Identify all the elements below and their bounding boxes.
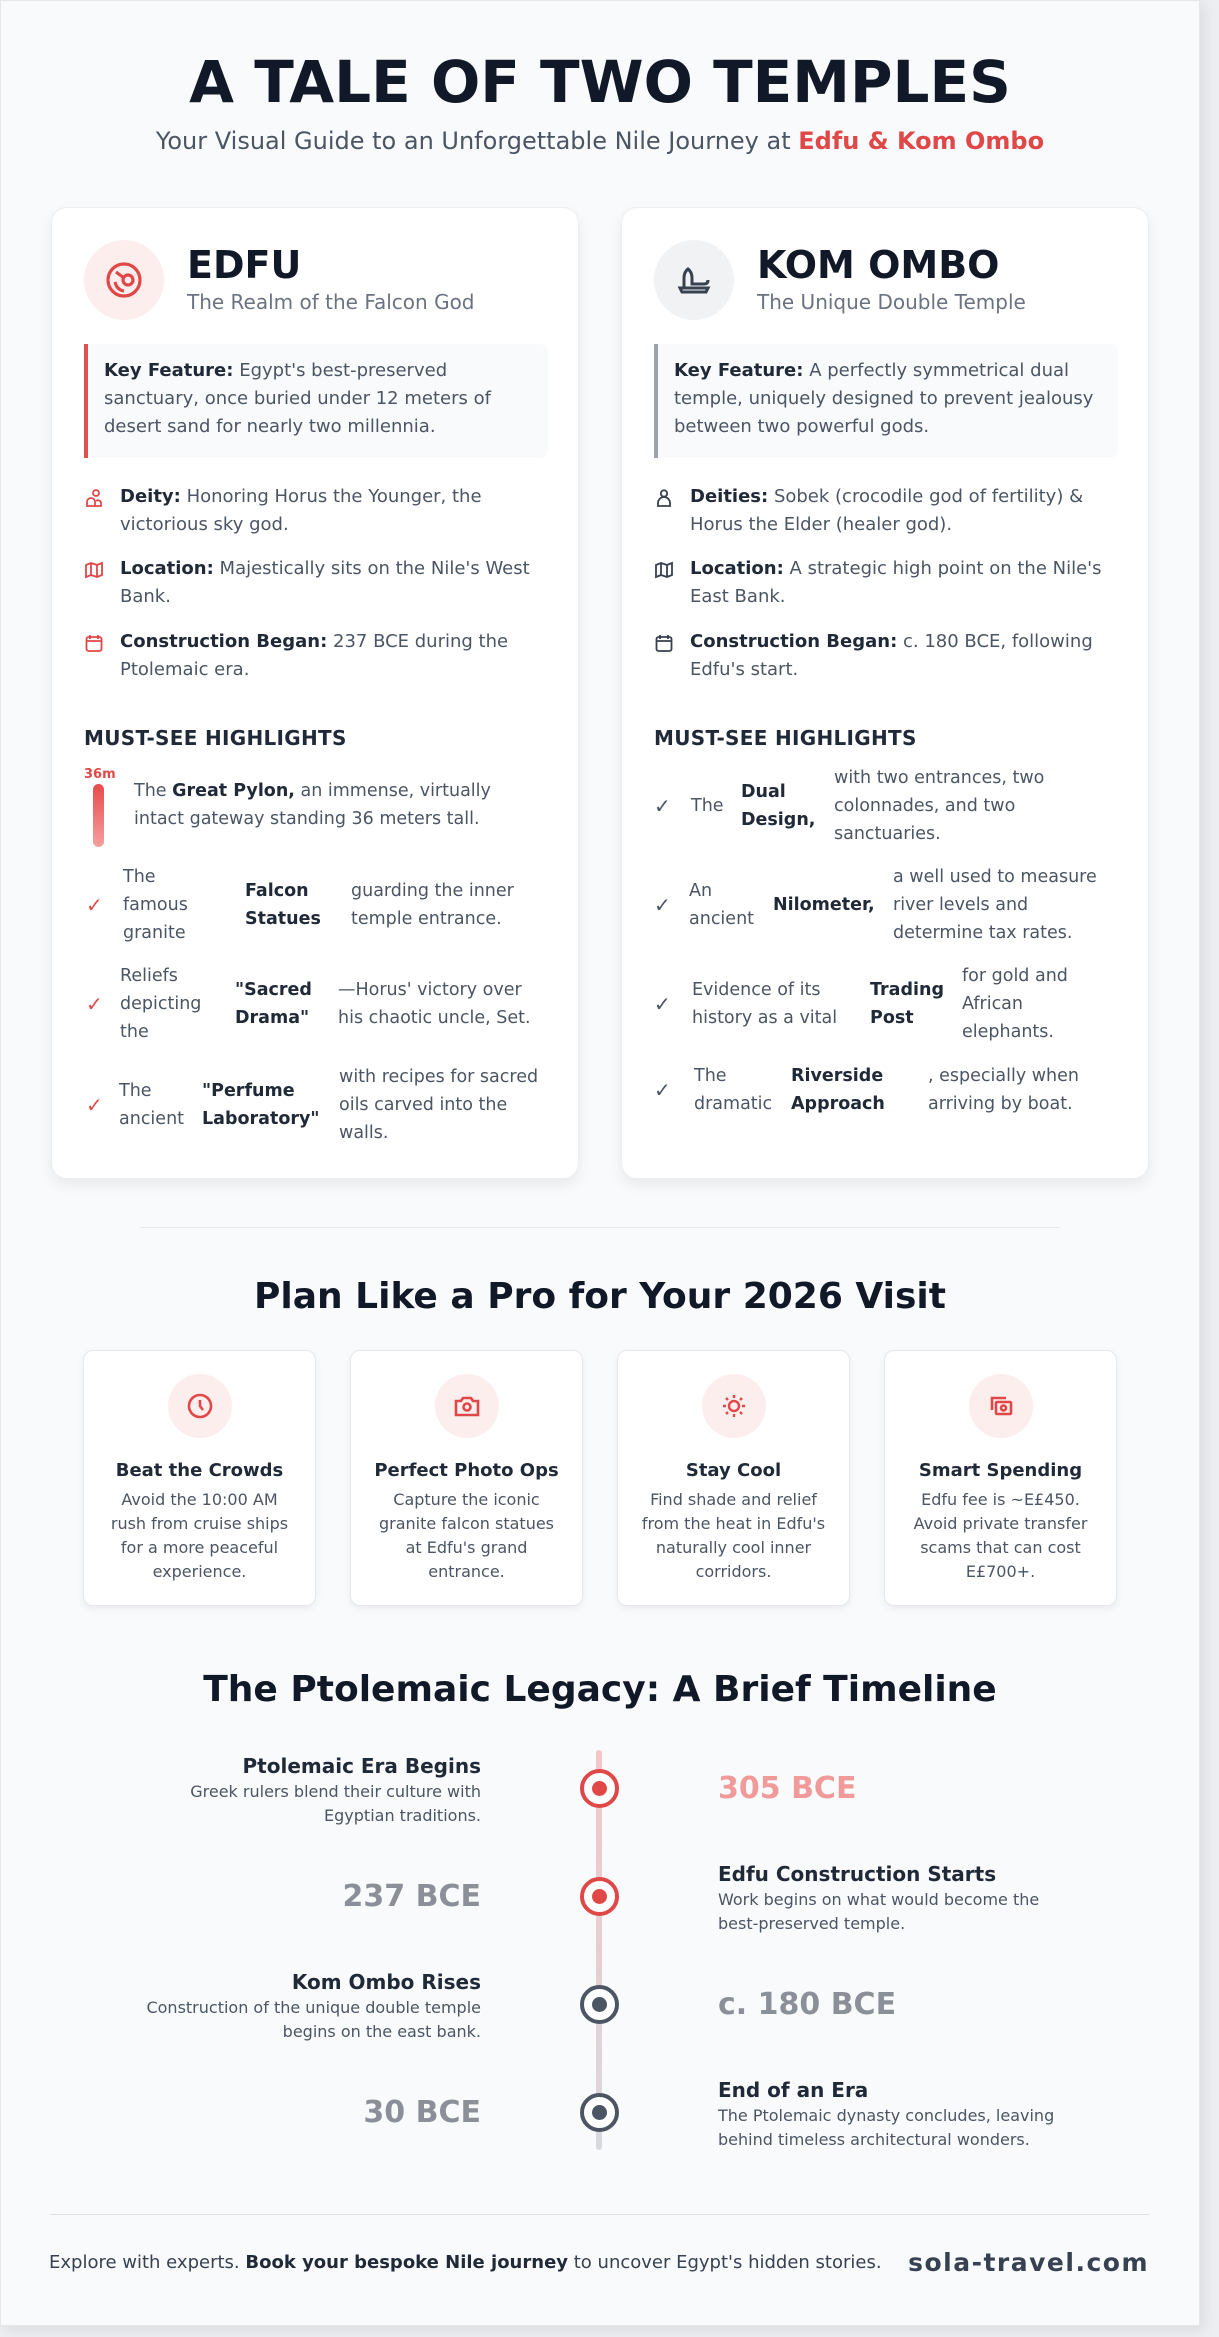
highlight: sacred drama: "Sacred: [235, 980, 312, 1000]
highlight: perfume lab: ancient: [119, 1109, 184, 1129]
highlight: perfume lab: [86, 1067, 538, 1143]
highlight: nilometer: An: [689, 881, 712, 901]
highlight: dual design: ✓: [654, 794, 671, 818]
panel: edfu: [51, 207, 579, 1179]
info: location: Location: A strategic high point on the Nile's East Bank.: [690, 558, 1101, 607]
event: edfu: Work begins on what would become the: [718, 1890, 1039, 1909]
highlight: falcon statues: granite: [123, 923, 186, 943]
highlight: trading post: Trading: [870, 980, 944, 1000]
highlight: falcon statues: Statues: [245, 909, 321, 929]
event: end: behind timeless architectural wonders.: [718, 2130, 1030, 2149]
highlight: nilometer: Nilometer,: [773, 895, 875, 915]
highlight: nilometer: ancient: [689, 909, 754, 929]
highlight: dual design: [654, 768, 1044, 844]
tip: crowds: Avoid the 10:00 AM rush from cruise ships for a more peaceful experience.: [111, 1490, 288, 1581]
highlight: falcon statues: ✓: [86, 893, 103, 917]
icon: sun: [702, 1374, 766, 1438]
tip: cool: Stay Cool: [686, 1460, 781, 1481]
event: kom ombo: begins on the east bank.: [283, 2022, 481, 2041]
highlight: trading post: elephants.: [962, 1022, 1054, 1042]
highlight: perfume lab: "Perfume: [202, 1081, 295, 1101]
highlight: sacred drama: the: [120, 1022, 149, 1042]
highlight: dual design: Dual: [741, 782, 786, 802]
info: location: Location: Majestically sits on the Nile's West Bank.: [120, 558, 530, 607]
heading: edfu: EDFU: [187, 243, 301, 287]
panel: kom ombo: [621, 207, 1149, 1179]
icon: camera: [434, 1374, 498, 1438]
event: kom ombo: [146, 1970, 481, 2041]
highlight: riverside: ✓: [654, 1078, 671, 1102]
key feature: Key Feature: Egypt's best-preserved sanctuary, once buried under 12 meters of desert sand for nearly two millennia.: [104, 360, 491, 437]
key feature: Key Feature: A perfectly symmetrical dual temple, uniquely designed to prevent jealousy between two powerful gods.: [674, 360, 1093, 437]
highlight: trading post: African: [962, 994, 1023, 1014]
tip: spending: Smart Spending: [919, 1460, 1082, 1481]
title: A TALE OF TWO TEMPLES: [189, 48, 1011, 116]
timeline: [146, 1750, 1054, 2150]
highlight: falcon statues: famous: [123, 895, 188, 915]
tip: cool: [617, 1350, 850, 1606]
date: 237: 237 BCE: [343, 1879, 481, 1914]
highlight: perfume lab: oils carved into the: [339, 1095, 507, 1115]
key feature: [654, 344, 1118, 458]
event: edfu: best-preserved temple.: [718, 1914, 905, 1933]
date: 30: 30 BCE: [363, 2095, 481, 2130]
tip: crowds: Beat the Crowds: [116, 1460, 283, 1481]
highlight: riverside: , especially when: [928, 1066, 1079, 1086]
highlight: nilometer: determine tax rates.: [893, 923, 1072, 943]
footer brand: sola-travel.com: [908, 2248, 1149, 2277]
tip: spending: [884, 1350, 1117, 1606]
key feature: [84, 344, 548, 458]
event: kom ombo: Construction of the unique double temple: [146, 1998, 481, 2017]
highlight: nilometer: ✓: [654, 893, 671, 917]
highlight: falcon statues: temple entrance.: [351, 909, 502, 929]
node: 180: [580, 1985, 619, 2024]
highlight: trading post: history as a vital: [692, 1008, 837, 1028]
highlight: trading post: ✓: [654, 992, 671, 1016]
highlight: perfume lab: ✓: [86, 1093, 103, 1117]
heading: highlights: MUST-SEE HIGHLIGHTS: [654, 726, 917, 750]
icon: clock: [168, 1374, 232, 1438]
highlight: sacred drama: —Horus' victory over: [338, 980, 522, 1000]
event: ptolemaic era: [190, 1754, 481, 1825]
event: ptolemaic era: Ptolemaic Era Begins: [242, 1754, 481, 1778]
highlight: great pylon: [84, 767, 491, 847]
tip: crowds: [83, 1350, 316, 1606]
event: end: End of an Era: [718, 2078, 868, 2102]
highlight: trading post: [654, 966, 1068, 1042]
highlight: falcon statues: guarding the inner: [351, 881, 514, 901]
highlight: riverside: dramatic: [694, 1094, 772, 1114]
highlight: sacred drama: his chaotic uncle, Set.: [338, 1008, 531, 1028]
highlight: falcon statues: The: [123, 867, 156, 887]
event: end: The Ptolemaic dynasty concludes, leaving: [718, 2106, 1054, 2125]
info: deities: Deities: Sobek (crocodile god of fertility) & Horus the Elder (healer god).: [690, 486, 1083, 535]
date: 180: c. 180 BCE: [718, 1987, 896, 2022]
heading: kom ombo: KOM OMBO: [757, 243, 999, 287]
highlight: perfume lab: The: [119, 1081, 152, 1101]
highlight: falcon statues: [86, 867, 514, 943]
event: edfu: Edfu Construction Starts: [718, 1862, 996, 1886]
highlight: nilometer: a well used to measure: [893, 867, 1097, 887]
highlight: sacred drama: Reliefs: [120, 966, 178, 986]
highlight: dual design: colonnades, and two: [834, 796, 1015, 816]
highlight: dual design: The: [691, 796, 724, 816]
icon: kom ombo: [654, 240, 734, 320]
heading: timeline: The Ptolemaic Legacy: A Brief Timeline: [203, 1669, 997, 1710]
highlight: riverside: [654, 1066, 1079, 1114]
highlight: riverside: Riverside: [791, 1066, 883, 1086]
highlight: sacred drama: Drama": [235, 1008, 309, 1028]
event: edfu: [718, 1862, 1039, 1933]
highlight: nilometer: river levels and: [893, 895, 1028, 915]
event: ptolemaic era: Egyptian traditions.: [324, 1806, 481, 1825]
highlight: perfume lab: with recipes for sacred: [339, 1067, 538, 1087]
highlight: dual design: sanctuaries.: [834, 824, 941, 844]
info: deity: Deity: Honoring Horus the Younger, the victorious sky god.: [120, 486, 482, 535]
icon: money: [968, 1374, 1032, 1438]
tip: photo: [350, 1350, 583, 1606]
subtitle: Your Visual Guide to an Unforgettable Nile Journey at Edfu & Kom Ombo: [156, 127, 1044, 155]
footer text: Explore with experts. Book your bespoke Nile journey to uncover Egypt's hidden stories.: [49, 2252, 882, 2273]
highlight: trading post: for gold and: [962, 966, 1068, 986]
highlight: riverside: Approach: [791, 1094, 885, 1114]
tip: photo: Perfect Photo Ops: [374, 1460, 559, 1481]
highlight: trading post: Post: [870, 1008, 914, 1028]
tip: spending: Edfu fee is ~E£450. Avoid private transfer scams that can cost E£700+.: [914, 1490, 1087, 1581]
info: construction: Construction Began: 237 BCE during the Ptolemaic era.: [120, 631, 508, 680]
highlight: great pylon: intact gateway standing 36 meters tall.: [134, 809, 480, 829]
highlight: dual design: Design,: [741, 810, 815, 830]
highlight: riverside: The: [694, 1066, 727, 1086]
highlight: riverside: arriving by boat.: [928, 1094, 1073, 1114]
highlight: great pylon: 36m: [84, 767, 116, 782]
highlight: perfume lab: Laboratory": [202, 1109, 320, 1129]
event: ptolemaic era: Greek rulers blend their culture with: [190, 1782, 481, 1801]
highlight: falcon statues: Falcon: [245, 881, 309, 901]
info: construction: Construction Began: c. 180 BCE, following Edfu's start.: [690, 631, 1093, 680]
highlight: perfume lab: walls.: [339, 1123, 388, 1143]
highlight: trading post: Evidence of its: [692, 980, 820, 1000]
highlight: nilometer: [654, 867, 1097, 943]
event: end: [718, 2078, 1054, 2149]
highlight: dual design: with two entrances, two: [834, 768, 1044, 788]
panel: kom ombo: The Unique Double Temple: [757, 290, 1026, 314]
highlight: sacred drama: depicting: [120, 994, 201, 1014]
date: 305: 305 BCE: [718, 1771, 856, 1806]
heading: plan: Plan Like a Pro for Your 2026 Visit: [254, 1276, 946, 1317]
node: 30: [580, 2093, 619, 2132]
tip: photo: Capture the iconic granite falcon statues at Edfu's grand entrance.: [379, 1490, 554, 1581]
tip: cool: Find shade and relief from the heat in Edfu's naturally cool inner corridors.: [642, 1490, 825, 1581]
icon: edfu: [84, 240, 164, 320]
highlight: sacred drama: ✓: [86, 992, 103, 1016]
event: kom ombo: Kom Ombo Rises: [292, 1970, 481, 1994]
panel: edfu: The Realm of the Falcon God: [187, 290, 474, 314]
highlight: sacred drama: [86, 966, 531, 1042]
highlight: great pylon: The Great Pylon, an immense, virtually: [134, 781, 491, 801]
node: 305: [580, 1769, 619, 1808]
heading: highlights: MUST-SEE HIGHLIGHTS: [84, 726, 347, 750]
node: 237: [580, 1877, 619, 1916]
